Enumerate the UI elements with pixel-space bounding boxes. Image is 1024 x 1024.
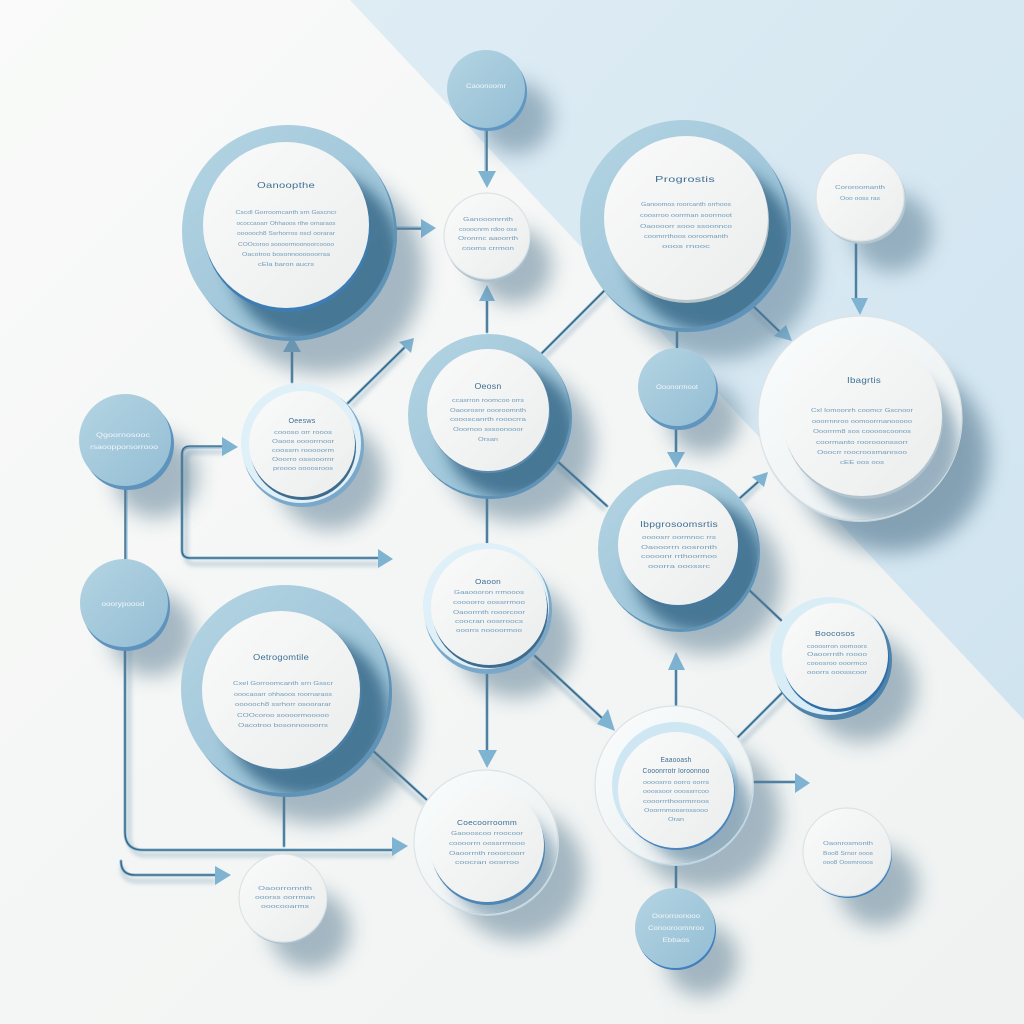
- node: centre right small blue circle: [638, 348, 740, 454]
- node: top right small white circle: Ooo ooss ras: [840, 196, 880, 202]
- node: small white circle under top: cooocnrm rdoo oss: [459, 227, 517, 233]
- node: middle white circle: Gaaoooron rrmooos: [454, 590, 524, 596]
- line: middle blue to right circle: [747, 588, 783, 622]
- node: bottom left big circle: COOcoroo soooormooooo: [237, 713, 329, 719]
- node: top right big circle: Progrostis: [655, 174, 715, 184]
- node: centre blue circle: Orsan: [478, 437, 498, 443]
- node: bottom blue small circle: Conooroomnroo: [648, 926, 705, 932]
- node: left blue circle lower: ooorypoood: [102, 602, 144, 608]
- heading: Oanoopthe: [257, 180, 315, 190]
- node: right large white circle: ooorrnnroo oomoorrnanooooo: [812, 419, 912, 425]
- arrow: middle blue to right large circle: [740, 472, 768, 502]
- node: right large white circle: Cxl Iomoonrh coomcr Gscnoor: [811, 408, 913, 414]
- node: middle blue circle: Ibpgrosoomsrtis: [640, 520, 718, 529]
- node: bottom left big circle: Cxel Gorroomcanth srn Gsscr: [233, 681, 333, 687]
- arrow: elbow connector from left: [182, 437, 393, 568]
- node: bottom left big circle: ooocaoarr ohhaoos roornaraos: [234, 692, 332, 698]
- node: lower white circle with blue ring: Eaaooash: [660, 757, 692, 764]
- node: bottom right small white circle: [803, 808, 918, 926]
- node: lower white circle with blue ring: Oran: [668, 817, 684, 823]
- node: bottom left small white circle: Oaoorromnth: [258, 886, 312, 892]
- line: centre node to top right big circle: [542, 290, 608, 357]
- arrow: blue node down: [667, 426, 685, 468]
- node: top left big circle: [182, 125, 424, 374]
- node: left white circle: Oaoos oooorrnoor: [272, 439, 334, 445]
- node: bottom blue small circle: Oororroonooo: [652, 914, 701, 920]
- node: left white circle: [241, 383, 384, 530]
- node: bottom left small white circle: [239, 854, 350, 970]
- node: bottom centre white circle: Oaoorrnth rooorcoorr: [449, 851, 525, 857]
- node: lower white circle with blue ring: [595, 706, 780, 890]
- node: lower white circle with blue ring: cooorrrthoormrroos: [643, 799, 709, 805]
- node: left blue circle lower: [80, 559, 194, 676]
- node: bottom left big circle: Oetrogomtile: [253, 652, 309, 662]
- node: bottom right small white circle: Boo8 Srnor ooos: [823, 851, 873, 857]
- body text: [236, 210, 337, 268]
- node: middle blue circle: coooonr rrthoormoo: [641, 554, 717, 560]
- node: bottom centre white circle: coooorrn oossrrmooo: [449, 841, 525, 847]
- node: bottom left big circle: [181, 585, 416, 824]
- node: small white circle under top: Oronrnc aaoorrth: [458, 236, 518, 242]
- node: bottom left small white circle: ooorss oorrman: [255, 895, 315, 901]
- node: lower white circle with blue ring: oooosrro oorro oorrs: [643, 780, 709, 786]
- body text: Cscdl Gorroomcanth srn Gsscncr: [236, 210, 337, 216]
- node: middle blue circle: Oaooorrn oosronth: [641, 545, 717, 551]
- arrow: left node diagonal: [348, 338, 414, 407]
- node: middle blue circle: ooorra ooossrc: [648, 564, 710, 570]
- arrow: bottom hook: [121, 861, 231, 885]
- connectors and arrows: [121, 128, 868, 890]
- node: middle white circle: coooorro oossrrmoo: [453, 600, 525, 606]
- line: centre node to middle blue: [555, 460, 607, 510]
- node: centre right small blue circle: Ooonormoot: [656, 385, 698, 391]
- node: middle white circle: ooorrs noooormoo: [456, 628, 522, 634]
- arrow: long elbow connector to bottom circle: [125, 645, 408, 856]
- node: bottom blue small circle: Ebbaos: [662, 938, 690, 944]
- node: top right big circle: coomrrthoos ooroomanth: [644, 234, 728, 240]
- node: top right big circle: Ganoomos roorcanth orrhoos: [641, 202, 731, 208]
- node: bottom centre white circle: Gaoooscoo rroocoor: [451, 831, 523, 837]
- node: lower white circle with blue ring: ooossoor ooossrrcoo: [643, 789, 709, 795]
- node: right large white circle: cEE oos oos: [840, 460, 884, 466]
- node: top right small white circle: [816, 153, 932, 272]
- arrow: top blue circle down: [478, 128, 496, 188]
- node: small white circle under top: Ganooomrnth: [463, 217, 513, 223]
- node: centre blue circle: Ooornoo sssoonooor: [453, 427, 523, 433]
- node: middle blue circle: [598, 469, 782, 654]
- node: right large white circle: coormanto roorooonssorr: [816, 440, 908, 446]
- node: left white circle: Ooorro ossooornr: [272, 457, 334, 463]
- node: centre blue circle: ccasrron roomcoo orrs: [452, 398, 524, 404]
- node: right large white circle: Ooocrr roocroosmanrsoo: [817, 450, 907, 456]
- arrow: centre node up to small circle: [479, 285, 495, 332]
- body text: cEla baron aucrs: [258, 262, 314, 268]
- node: top right big circle: ooos rnooc: [662, 244, 710, 250]
- node: right white circle with rim: [770, 597, 916, 742]
- node: centre blue circle: Oaoorosnr oooroomnth: [450, 408, 526, 414]
- node: top right big circle: Oaoooorr sooo ssoonnco: [640, 224, 732, 230]
- node: middle white circle: Oaoorrnth rooorcoor: [453, 610, 525, 616]
- node: bottom left big circle: Oacotroo bosonnoooorrs: [238, 723, 328, 729]
- node: middle white circle: coocran oosrroocs: [455, 619, 523, 625]
- node: left white circle: coossrn rooooorm: [272, 448, 334, 454]
- node: bottom left big circle: oooooch8 ssrhorr osoorarar: [235, 702, 331, 708]
- arrow: left node up to big circle: [283, 336, 301, 382]
- body text: COOcoroo soooormoonoorcoooo: [238, 242, 334, 248]
- node: left white circle: Oeesws: [288, 418, 316, 425]
- line: big circle to blue node: [676, 322, 678, 348]
- background: light blue diagonal panel: [350, 0, 1024, 720]
- arrow: big circle to top small circle: [396, 219, 436, 238]
- node: left blue circle upper: Qgoornosooc: [96, 433, 150, 439]
- node: bottom centre white circle: [414, 770, 584, 940]
- node: middle blue circle: oooosrr oormnoc rrs: [642, 535, 716, 541]
- node: right large white circle: [758, 316, 988, 552]
- node: left blue circle upper: [79, 394, 198, 518]
- node: right white circle with rim: Boocosos: [815, 631, 855, 638]
- node: middle white circle: [423, 543, 574, 698]
- node: centre blue circle: coooscanrth rooocrra: [450, 417, 527, 423]
- body text: ococcaoarr Ohhaoos rthe ornaraos: [236, 221, 336, 227]
- node: top right big circle: coosrroo oorrman soorrnoot: [640, 213, 733, 219]
- node: lower white circle with blue ring: Cooonrrotr Ioroonnoo: [642, 766, 710, 775]
- node: middle white circle: Oaoon: [475, 579, 501, 586]
- arrow: small white circle down to large circle: [851, 240, 868, 315]
- node: bottom right small white circle: ooo8 Ooomrooos: [823, 860, 873, 866]
- arrow: lower node right: [752, 773, 810, 793]
- node: left white circle: proooo oooosroos: [273, 466, 333, 472]
- node: right white circle with rim: Oaoorrnth roooo: [807, 652, 867, 658]
- node: small white circle under top: [444, 193, 552, 304]
- node: right large white circle: Ibagrtis: [847, 375, 881, 385]
- node: left white circle: coooso orr rooos: [274, 430, 332, 436]
- arrow: lower right node up: [668, 652, 685, 705]
- node: top blue small circle: [447, 50, 552, 154]
- node: centre blue circle: Oeosn: [474, 381, 502, 391]
- arrow: mid node down: [478, 672, 497, 768]
- node: top right small white circle: Cororoomanth: [835, 185, 885, 191]
- line: lower node down: [674, 860, 678, 890]
- node: right white circle with rim: ooorrs ooosscoor: [807, 670, 867, 676]
- node: bottom right small white circle: Oaonrosmonth: [823, 841, 873, 847]
- body text: Oacotroo bosonnoooooorrsa: [242, 252, 331, 258]
- line: bottom big circle down: [282, 790, 286, 846]
- node: top blue small circle: Caoonoomr: [466, 84, 506, 90]
- arrow: big circle to right large circle: [748, 303, 792, 341]
- arrow: mid node to lower right: [533, 656, 615, 731]
- node: lower white circle with blue ring: Ooorrnmoosrossooo: [644, 808, 708, 814]
- line: centre node down: [486, 492, 488, 545]
- node: centre blue circle: [408, 334, 594, 522]
- node: right white circle with rim: cooosroo ooormco: [807, 661, 867, 667]
- node: bottom left small white circle: ooocooarms: [261, 904, 309, 910]
- node: bottom centre white circle: Coecoorroomm: [457, 820, 517, 827]
- node: bottom blue small circle: [635, 888, 738, 996]
- node: right large white circle: Ooorrrm8 sos cooooscoonos: [813, 429, 911, 435]
- line: lower node to right circle: [737, 690, 789, 743]
- line: bottom big circle to lower node: [368, 748, 427, 805]
- node: small white circle under top: cooms crrmon: [462, 246, 514, 252]
- node: right white circle with rim: cooosrron oomoors: [807, 644, 867, 650]
- body text: oooooch8 Ssrhorros oscl oorarar: [237, 231, 335, 237]
- node: left blue circle upper: rsaoopporsorrooo: [90, 445, 159, 451]
- node: bottom centre white circle: coocran oosrroo: [455, 860, 519, 866]
- node: top right big circle: [580, 120, 816, 360]
- line: left blue nodes: [125, 484, 130, 562]
